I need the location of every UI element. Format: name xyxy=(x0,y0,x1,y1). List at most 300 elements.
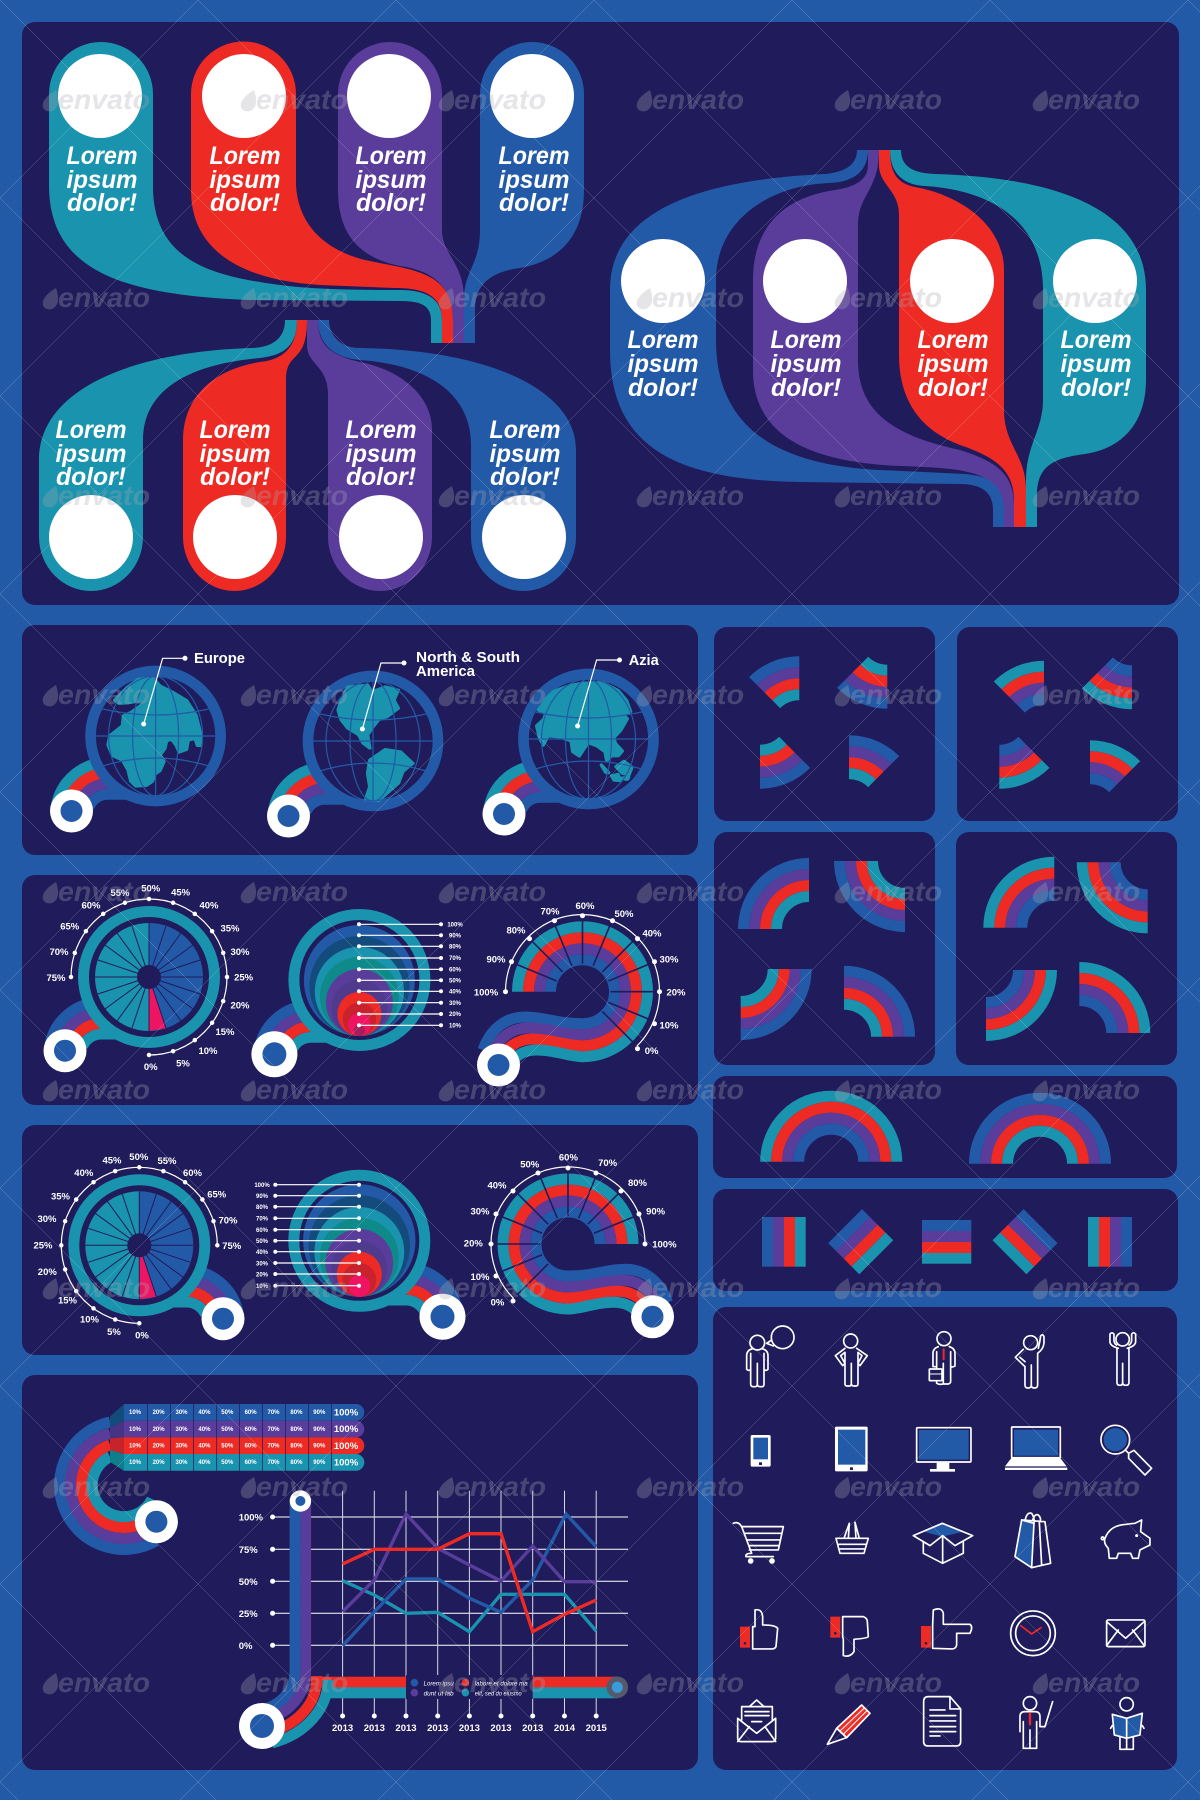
chart: radial arc mirrored: 90% xyxy=(646,1206,666,1218)
watermark grid: envato xyxy=(58,876,150,907)
callout group: right xyxy=(610,150,1146,527)
wedge 1 xyxy=(998,666,1044,709)
table row 1: 40% xyxy=(198,1410,211,1416)
panel: rainbow arcs xyxy=(713,1076,1177,1178)
watermark grid: envato xyxy=(58,679,150,710)
icon: pencil xyxy=(827,1705,870,1744)
table row 2: 40% xyxy=(198,1427,211,1433)
watermark grid: envato xyxy=(1048,1667,1140,1698)
table row 4: 100% xyxy=(334,1458,359,1468)
globe: Asia xyxy=(482,652,659,836)
table row 2 xyxy=(129,1424,359,1435)
watermark grid: envato xyxy=(58,282,150,313)
table row 4: 80% xyxy=(290,1460,303,1466)
callout: teal right xyxy=(890,150,1146,527)
icon: thumb down xyxy=(830,1617,868,1656)
callout: blue top: ipsum xyxy=(498,166,570,194)
callout: red bottom: dolor! xyxy=(200,463,270,491)
watermark grid: envato xyxy=(454,1272,546,1303)
watermark grid: envato xyxy=(256,679,348,710)
chart: dial gauge mirrored: 25% xyxy=(33,1240,53,1252)
chart: dial gauge: 30% xyxy=(230,947,250,958)
chart: radial arc: 100% xyxy=(474,988,499,998)
icon: envelope xyxy=(1107,1620,1145,1647)
y axis labels xyxy=(239,1512,273,1652)
table row 3: 100% xyxy=(334,1441,359,1452)
callout: blue right xyxy=(610,150,1004,527)
chart: line chart xyxy=(239,1490,628,1749)
callout: red top xyxy=(191,42,453,343)
callout: teal bottom xyxy=(39,320,297,591)
icon: magnifier xyxy=(1101,1425,1152,1475)
wedge 4 xyxy=(849,741,895,783)
chart: nested circles mirrored: 30% xyxy=(256,1262,269,1268)
watermark grid: envato xyxy=(1048,84,1140,115)
chart: nested circles mirrored: 90% xyxy=(256,1194,269,1200)
callout: red bottom: Lorem xyxy=(200,416,270,444)
chart: radial arc: 30% xyxy=(659,954,679,966)
quarter arc 2 xyxy=(1082,862,1148,928)
chart: radial arc: 0% xyxy=(645,1046,659,1057)
chart: dial gauge: 75% xyxy=(46,973,66,984)
callout: blue bottom xyxy=(318,320,576,591)
quarter arc 3 xyxy=(986,970,1052,1036)
table row 2: 10% xyxy=(129,1427,142,1433)
callout: purple right: Lorem xyxy=(770,326,842,354)
chart: radial arc: 80% xyxy=(506,926,526,936)
chart: dial gauge mirrored: 10% xyxy=(80,1314,100,1326)
watermark grid: envato xyxy=(652,1667,744,1698)
y axis labels: 100% xyxy=(239,1512,264,1524)
chart: nested circles mirrored: 10% xyxy=(256,1284,269,1290)
chart: radial arc mirrored: 60% xyxy=(559,1152,578,1164)
quarter arc 4 xyxy=(1079,968,1145,1033)
watermark grid: envato xyxy=(1048,282,1140,313)
chart: dial gauge: 55% xyxy=(110,888,130,899)
panel: small wedges B xyxy=(957,627,1178,821)
table row 4 xyxy=(129,1458,359,1468)
icon: shopping bag xyxy=(1015,1513,1051,1568)
chart: nested circles mirrored: 100% xyxy=(254,1183,270,1189)
callout: red top: dolor! xyxy=(210,189,280,217)
chart: dial gauge mirrored: 15% xyxy=(58,1296,78,1306)
watermark grid: envato xyxy=(850,1074,942,1105)
watermark grid: envato xyxy=(850,1471,942,1502)
watermark grid: envato xyxy=(850,480,942,511)
table row 3: 50% xyxy=(221,1444,234,1450)
chart: dial gauge mirrored: 45% xyxy=(102,1156,122,1166)
chart: nested circles mirrored: 70% xyxy=(256,1216,269,1222)
chart: dial gauge: 25% xyxy=(234,972,254,984)
chart: nested circles xyxy=(251,914,463,1077)
chart: radial arc: 20% xyxy=(666,988,686,998)
callout: teal bottom: ipsum xyxy=(56,440,126,468)
table row 3: 60% xyxy=(245,1444,257,1450)
watermark grid: envato xyxy=(454,1667,546,1698)
chart: nested circles mirrored: 20% xyxy=(256,1272,269,1278)
callout: purple top: ipsum xyxy=(356,166,426,194)
wedge 1 xyxy=(753,662,799,704)
chart: dial gauge mirrored: 5% xyxy=(107,1327,121,1338)
watermark grid: envato xyxy=(58,1667,150,1698)
chart: dial gauge: 10% xyxy=(198,1046,218,1057)
quarter arc 4 xyxy=(844,971,910,1037)
callout: blue bottom: ipsum xyxy=(490,440,560,468)
callout: purple bottom: Lorem xyxy=(346,416,416,444)
table row 2: 30% xyxy=(175,1427,188,1433)
chart: nested circles mirrored: 40% xyxy=(256,1250,269,1256)
diamond left xyxy=(828,1209,893,1274)
chart: radial arc: 10% xyxy=(659,1020,679,1032)
callout: teal right: Lorem xyxy=(1060,326,1132,354)
icon: person hands on hips xyxy=(835,1334,867,1386)
quarter arc 1 xyxy=(989,862,1054,928)
table row 3: 10% xyxy=(129,1444,142,1450)
watermark grid: envato xyxy=(652,84,744,115)
chart: radial arc mirrored: 50% xyxy=(520,1160,540,1170)
chart: radial arc mirrored xyxy=(464,1152,677,1338)
chart: curved bands with table xyxy=(60,1404,364,1549)
chart: radial arc: 60% xyxy=(575,901,595,912)
table row 1: 30% xyxy=(175,1410,188,1416)
watermark grid: envato xyxy=(256,480,348,511)
chart: nested circles: 80% xyxy=(449,944,462,950)
table row 1: 50% xyxy=(221,1410,234,1416)
table row 2: 20% xyxy=(153,1427,165,1433)
table row 4: 90% xyxy=(313,1460,326,1466)
watermark grid: envato xyxy=(652,480,744,511)
table row 3: 70% xyxy=(267,1444,280,1450)
chart: dial gauge mirrored: 20% xyxy=(38,1267,57,1278)
series: blue xyxy=(343,1514,596,1646)
y axis labels: 75% xyxy=(239,1545,258,1556)
chart: radial arc mirrored: 30% xyxy=(470,1206,490,1218)
quarter arc 3 xyxy=(741,969,806,1034)
chart: dial gauge: 35% xyxy=(220,924,240,934)
table row 3: 90% xyxy=(313,1444,326,1450)
chart: radial arc: 90% xyxy=(486,954,506,966)
square horizontal xyxy=(922,1220,971,1264)
y axis labels: 0% xyxy=(239,1641,253,1652)
series: purple xyxy=(343,1514,596,1612)
chart: dial gauge mirrored: 30% xyxy=(37,1214,57,1225)
chart: dial gauge: 15% xyxy=(215,1027,235,1038)
watermark grid: envato xyxy=(454,1074,546,1105)
callout: red right: Lorem xyxy=(918,326,988,354)
watermark grid: envato xyxy=(1048,1471,1140,1502)
panel: flow callouts xyxy=(22,22,1179,605)
callout: blue bottom: Lorem xyxy=(490,416,560,444)
x axis labels: 2014 xyxy=(554,1723,576,1734)
icon: businessman with case xyxy=(929,1332,955,1384)
table row 4: 20% xyxy=(153,1460,165,1466)
callout: teal bottom: dolor! xyxy=(56,463,126,491)
table row 1: 100% xyxy=(334,1408,359,1418)
callout: purple top: Lorem xyxy=(356,142,426,170)
chart: nested circles mirrored: 50% xyxy=(256,1239,269,1245)
chart: radial arc mirrored: 100% xyxy=(652,1240,677,1250)
table row 1: 20% xyxy=(153,1410,165,1416)
watermark grid: envato xyxy=(256,1471,348,1502)
chart: radial arc mirrored: 10% xyxy=(470,1272,490,1283)
watermark grid: envato xyxy=(454,480,546,511)
chart: dial gauge mirrored: 55% xyxy=(157,1156,177,1167)
chart: radial arc: 50% xyxy=(614,909,634,920)
icon: phone xyxy=(751,1435,770,1466)
legend: Lorem ipsu xyxy=(424,1680,454,1688)
table row 2: 80% xyxy=(290,1427,303,1433)
watermark grid: envato xyxy=(652,1074,744,1105)
legend: labore et dolore ma xyxy=(475,1680,528,1688)
watermark grid: envato xyxy=(454,679,546,710)
table row 3 xyxy=(129,1441,359,1452)
chart: nested circles: 10% xyxy=(449,1024,462,1030)
watermark grid: envato xyxy=(454,876,546,907)
watermark grid: envato xyxy=(58,1074,150,1105)
icon: box xyxy=(913,1523,973,1563)
table row 2: 50% xyxy=(221,1427,234,1433)
chart: nested circles: 20% xyxy=(449,1012,462,1018)
callout group: top left xyxy=(49,42,584,343)
table row 3: 40% xyxy=(198,1444,211,1450)
wedge 3 xyxy=(760,741,806,783)
chart: dial gauge: 60% xyxy=(81,900,101,912)
axis tube and bands xyxy=(239,1490,628,1749)
chart: dial gauge mirrored: 65% xyxy=(207,1190,227,1200)
x axis labels: 2013 xyxy=(427,1723,448,1734)
chart: nested circles: 100% xyxy=(447,922,463,928)
x axis labels: 2013 xyxy=(522,1723,543,1734)
table row 2: 60% xyxy=(245,1427,257,1433)
table row 4: 60% xyxy=(245,1460,257,1466)
watermark grid: envato xyxy=(256,876,348,907)
chart: dial gauge: 0% xyxy=(144,1062,158,1073)
watermark grid: envato xyxy=(58,84,150,115)
callout: red top: ipsum xyxy=(210,166,280,194)
watermark grid: envato xyxy=(652,679,744,710)
chart: dial gauge mirrored xyxy=(33,1152,244,1342)
legend xyxy=(406,1675,533,1699)
chart: dial gauge: 65% xyxy=(60,922,80,932)
icon: open mail xyxy=(738,1700,776,1742)
icon: monitor xyxy=(917,1428,971,1472)
chart: radial arc xyxy=(474,901,686,1086)
watermark grid: envato xyxy=(1048,679,1140,710)
callout: purple top: dolor! xyxy=(356,189,426,217)
watermark grid: envato xyxy=(58,1471,150,1502)
x axis labels: 2013 xyxy=(490,1723,512,1734)
chart: nested circles mirrored xyxy=(254,1175,466,1340)
callout: purple right xyxy=(753,150,1014,527)
wedge 4 xyxy=(1090,746,1136,788)
table row 3: 80% xyxy=(290,1444,303,1450)
watermark grid: envato xyxy=(256,1272,348,1303)
callout: red right: dolor! xyxy=(918,374,988,402)
table row 2: 90% xyxy=(313,1427,326,1433)
table row 1: 70% xyxy=(267,1410,280,1416)
watermark grid: envato xyxy=(850,1272,942,1303)
watermark grid: envato xyxy=(850,1667,942,1698)
panel: striped squares xyxy=(713,1189,1178,1291)
watermark grid: envato xyxy=(850,876,942,907)
globe: Americas xyxy=(267,649,520,838)
table row 3: 20% xyxy=(153,1444,165,1450)
callout: purple bottom: ipsum xyxy=(346,440,416,468)
watermark grid: envato xyxy=(454,84,546,115)
chart: radial arc mirrored: 40% xyxy=(487,1180,507,1192)
callout: blue top xyxy=(464,42,584,343)
chart: dial gauge mirrored: 40% xyxy=(74,1168,94,1179)
watermark grid: envato xyxy=(652,876,744,907)
panel: globes xyxy=(22,625,698,855)
square vertical A xyxy=(762,1217,806,1267)
callout: blue top: Lorem xyxy=(498,142,570,170)
chart: radial arc mirrored: 70% xyxy=(598,1158,618,1169)
watermark grid: envato xyxy=(1048,480,1140,511)
y axis labels: 50% xyxy=(239,1577,258,1588)
watermark grid: envato xyxy=(58,480,150,511)
table row 4: 70% xyxy=(267,1460,280,1466)
watermark grid: envato xyxy=(652,1272,744,1303)
watermark grid: envato xyxy=(1048,876,1140,907)
x axis labels: 2013 xyxy=(332,1723,353,1734)
chart: nested circles mirrored: 80% xyxy=(256,1205,269,1211)
chart: dial gauge: 70% xyxy=(49,947,69,958)
chart: radial arc mirrored: 0% xyxy=(491,1298,505,1308)
globe: Americas: America xyxy=(416,663,476,680)
icon: person arm raised xyxy=(1015,1335,1044,1388)
panel: icons xyxy=(713,1307,1177,1770)
callout: red bottom: ipsum xyxy=(200,440,270,468)
wedge 3 xyxy=(999,741,1046,783)
y axis labels: 25% xyxy=(239,1609,258,1620)
callout: purple bottom: dolor! xyxy=(346,463,416,491)
table row 3: 30% xyxy=(175,1444,188,1450)
watermark grid: envato xyxy=(652,282,744,313)
callout: red top: Lorem xyxy=(210,142,280,170)
table row 4: 50% xyxy=(221,1460,234,1466)
icon: document xyxy=(924,1697,961,1746)
chart: nested circles: 70% xyxy=(449,956,462,962)
globe: Europe: Europe xyxy=(194,650,245,667)
callout: teal right: dolor! xyxy=(1061,374,1131,402)
watermark grid: envato xyxy=(256,1074,348,1105)
icon: basket xyxy=(836,1522,868,1553)
callout: blue right: Lorem xyxy=(628,326,698,354)
watermark grid: envato xyxy=(1048,1074,1140,1105)
icon: clock xyxy=(1011,1611,1055,1656)
chart: nested circles: 50% xyxy=(449,978,462,984)
callout: teal top: ipsum xyxy=(66,166,138,194)
chart: nested circles: 40% xyxy=(449,990,462,996)
chart: dial gauge mirrored: 60% xyxy=(183,1168,203,1179)
callout: red bottom xyxy=(183,320,307,591)
chart: nested circles: 60% xyxy=(449,968,462,974)
half arc left xyxy=(766,1096,897,1162)
wedge 2 xyxy=(841,661,887,703)
callout: teal bottom: Lorem xyxy=(56,416,126,444)
x axis labels: 2013 xyxy=(459,1723,480,1734)
callout: teal top: dolor! xyxy=(67,189,137,217)
chart: dial gauge: 5% xyxy=(176,1058,190,1070)
table row 1: 90% xyxy=(313,1410,326,1416)
series: red xyxy=(343,1534,596,1632)
chart: dial gauge: 20% xyxy=(230,1000,250,1012)
icon: thumb sideways xyxy=(921,1609,972,1649)
chart: dial gauge: 50% xyxy=(141,884,161,894)
chart: radial arc: 70% xyxy=(540,906,560,918)
x axis labels: 2013 xyxy=(395,1723,417,1734)
watermark grid: envato xyxy=(1048,1272,1140,1303)
icon: shopping cart xyxy=(733,1523,783,1563)
x axis labels xyxy=(332,1716,607,1734)
chart: dial gauge mirrored: 70% xyxy=(218,1216,238,1226)
icon: teacher xyxy=(1020,1697,1053,1748)
globe: Europe xyxy=(50,650,245,832)
panel: table and line chart xyxy=(22,1375,698,1770)
callout: red right xyxy=(879,150,1026,527)
watermark grid: envato xyxy=(850,679,942,710)
panel: gauges lower xyxy=(22,1125,698,1355)
callout: blue right: dolor! xyxy=(628,374,698,402)
x axis labels: 2015 xyxy=(586,1723,607,1734)
legend: elit, sed do eiusmo xyxy=(475,1690,522,1698)
icon: person reading xyxy=(1111,1698,1144,1749)
globe: Americas: North & South xyxy=(416,649,520,666)
diamond right xyxy=(992,1209,1058,1274)
callout: teal top xyxy=(49,42,442,343)
chart: nested circles: 30% xyxy=(449,1001,462,1007)
callout: purple right: ipsum xyxy=(770,350,842,378)
watermark grid: envato xyxy=(454,1471,546,1502)
half arc right xyxy=(974,1098,1106,1164)
icon: thumb up xyxy=(740,1610,778,1649)
table row 4: 30% xyxy=(175,1460,188,1466)
legend: dunt ut lab xyxy=(424,1690,454,1698)
chart: dial gauge mirrored: 75% xyxy=(222,1241,242,1252)
table row 4: 40% xyxy=(198,1460,211,1466)
callout: purple bottom xyxy=(307,320,432,591)
quarter arc 1 xyxy=(744,864,809,929)
table row 4: 10% xyxy=(129,1460,142,1466)
chart: dial gauge mirrored: 35% xyxy=(51,1192,71,1202)
panel: quarter arcs C xyxy=(714,832,935,1065)
callout: teal right: ipsum xyxy=(1060,350,1132,378)
callout: blue bottom: dolor! xyxy=(490,463,560,491)
watermark grid: envato xyxy=(256,1667,348,1698)
callout: blue top: dolor! xyxy=(499,189,569,217)
series: teal xyxy=(343,1581,596,1632)
icon: tablet xyxy=(835,1427,867,1471)
panel: small wedges A xyxy=(714,627,935,821)
icon: person with speech bubble xyxy=(747,1326,794,1387)
x axis labels: 2013 xyxy=(364,1723,385,1734)
chart: radial arc mirrored: 20% xyxy=(464,1238,483,1250)
watermark grid: envato xyxy=(58,1272,150,1303)
watermark grid: envato xyxy=(850,84,942,115)
panel: gauges upper xyxy=(22,875,698,1105)
watermark grid: envato xyxy=(256,84,348,115)
icon: person both arms up xyxy=(1110,1333,1136,1385)
chart: dial gauge: 45% xyxy=(171,888,191,898)
watermark grid: envato xyxy=(850,282,942,313)
chart: dial gauge xyxy=(44,884,254,1073)
chart: nested circles: 90% xyxy=(449,934,462,940)
chart: radial arc mirrored: 80% xyxy=(628,1178,648,1189)
icon: piggy bank xyxy=(1101,1520,1150,1558)
square vertical B xyxy=(1088,1217,1132,1267)
callout: red right: ipsum xyxy=(918,350,988,378)
